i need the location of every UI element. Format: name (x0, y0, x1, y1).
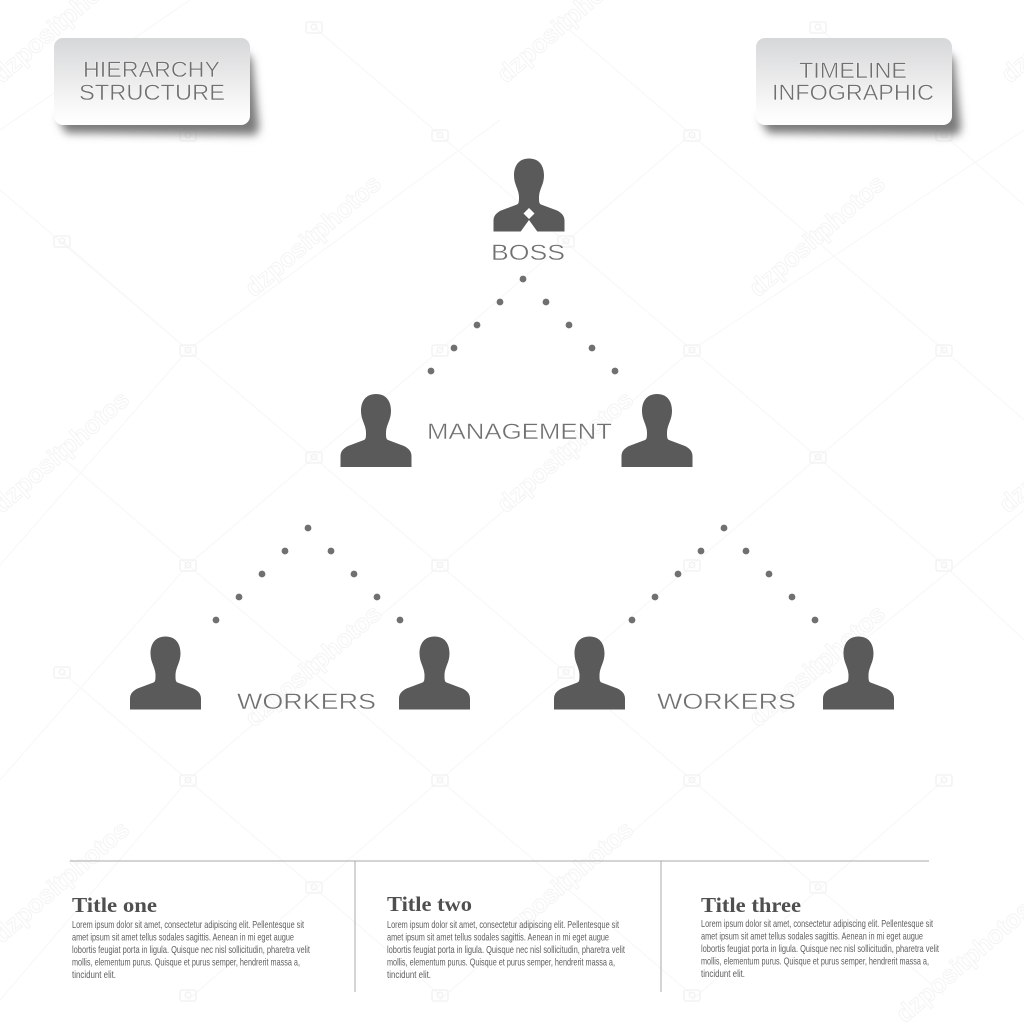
dotted connector: left workers (213, 525, 403, 623)
body text: title two: tincidunt elit. (387, 969, 431, 981)
body text: title one (72, 919, 310, 981)
watermark background: dzpositphotos (492, 385, 639, 519)
body text: title one: tincidunt elit. (72, 969, 116, 981)
card title: hierarchy structure: HIERARCHY (83, 57, 220, 82)
heading: title three: Title three (701, 893, 801, 917)
heading: title two: Title two (387, 892, 472, 916)
body text: title three (701, 918, 939, 980)
body text: title one: lobortis feugiat porta in ligula. Quisque nec nisl sollicitudin, pharetra velit (72, 944, 310, 956)
card: timeline infographic (756, 38, 961, 135)
card title: timeline infographic (772, 58, 934, 105)
icon: worker 1 (130, 636, 201, 710)
body text: title three: mollis, elementum purus. Quisque et purus semper, hendrerit massa a, (701, 956, 929, 968)
icon: worker 2 (399, 636, 470, 710)
watermark background: dzpositphotos (240, 599, 387, 733)
body text: title two: lobortis feugiat porta in ligula. Quisque nec nisl sollicitudin, pharetra velit (387, 944, 625, 956)
body text: title three: Lorem ipsum dolor sit amet, consectetur adipiscing elit. Pellentesque sit (701, 918, 933, 930)
card: hierarchy structure (54, 38, 259, 135)
body text: title two: mollis, elementum purus. Quisque et purus semper, hendrerit massa a, (387, 956, 615, 968)
watermark background: dzpositphotos (744, 169, 891, 303)
label: management: MANAGEMENT (427, 419, 612, 444)
watermark background: dzpositphotos (744, 599, 891, 733)
body text: title one: amet ipsum sit amet tellus sodales sagittis. Aenean in mi eget augue (72, 932, 294, 944)
card title: hierarchy structure: STRUCTURE (79, 80, 225, 105)
body text: title one: mollis, elementum purus. Quisque et purus semper, hendrerit massa a, (72, 956, 300, 968)
body text: title three: tincidunt elit. (701, 968, 745, 980)
dotted connector: boss to management (428, 276, 618, 374)
dotted connector: right workers (629, 525, 818, 623)
body text: title two: Lorem ipsum dolor sit amet, consectetur adipiscing elit. Pellentesque sit (387, 919, 619, 931)
icon: manager left (340, 394, 412, 467)
column: title two (387, 892, 625, 981)
card title: hierarchy structure (79, 57, 225, 105)
body text: title three: amet ipsum sit amet tellus sodales sagittis. Aenean in mi eget augue (701, 930, 923, 942)
heading: title one: Title one (72, 893, 157, 917)
icon: manager right (622, 394, 692, 467)
card title: timeline infographic: INFOGRAPHIC (772, 80, 934, 105)
body text: title two (387, 919, 625, 981)
watermark background: dzpositphotos (240, 169, 387, 303)
label: boss: BOSS (491, 240, 565, 265)
column: title three (701, 893, 939, 980)
icon: worker 4 (823, 636, 894, 710)
body text: title one: Lorem ipsum dolor sit amet, consectetur adipiscing elit. Pellentesque sit (72, 919, 304, 931)
label: workers right: WORKERS (657, 689, 796, 714)
icon: worker 3 (554, 636, 625, 710)
label: workers left: WORKERS (237, 689, 376, 714)
icon: boss (494, 158, 564, 232)
card title: timeline infographic: TIMELINE (799, 58, 907, 83)
column: title one (72, 893, 310, 981)
watermark background: dzpositphotos (492, 815, 639, 949)
body text: title two: amet ipsum sit amet tellus sodales sagittis. Aenean in mi eget augue (387, 932, 609, 944)
